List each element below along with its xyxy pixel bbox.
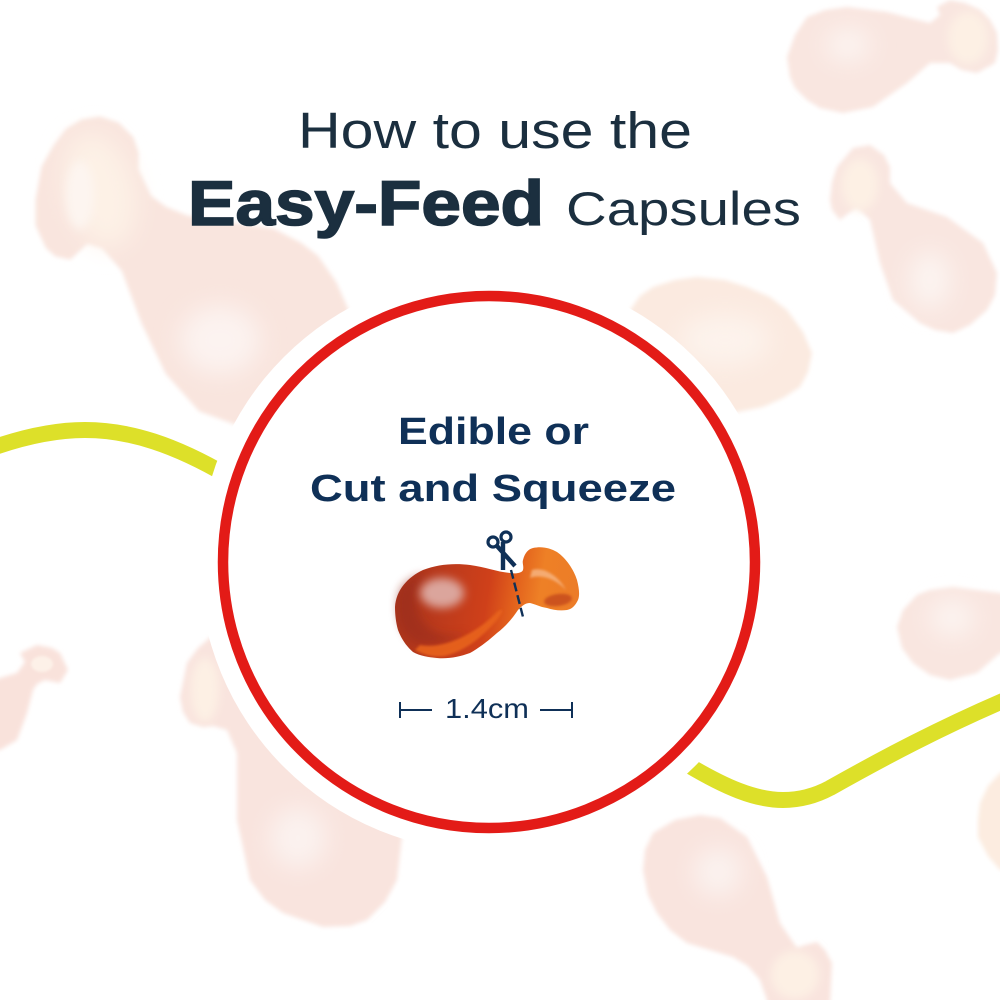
- capsule illustration: [395, 547, 579, 658]
- title: Easy-Feed Capsules: [188, 169, 801, 239]
- faded capsule: bottom right: [643, 815, 832, 1000]
- faded capsule: top right: [787, 0, 998, 113]
- subheading: Edible or Cut and Squeeze: Cut and Squeeze: [310, 468, 676, 510]
- icon: scissors with dashed cut line: [488, 532, 523, 617]
- faded capsule: far right edge: [978, 773, 1000, 870]
- faded capsule: right middle: [897, 587, 1000, 680]
- faded capsule: right: [830, 145, 997, 333]
- faded capsule: top left: [37, 118, 347, 423]
- subheading: Edible or Cut and Squeeze: [310, 411, 676, 510]
- title: How to use the: How to use the: [298, 102, 692, 159]
- faded capsule: bottom centre: [180, 635, 402, 927]
- title: Easy-Feed Capsules: Capsules: [566, 182, 801, 235]
- subheading: Edible or Cut and Squeeze: Edible or: [398, 411, 589, 453]
- faded capsule: behind circle, right: [630, 277, 812, 413]
- faded capsule: far left: [0, 645, 68, 750]
- title: Easy-Feed Capsules: Easy-Feed: [188, 169, 544, 239]
- yellow-green curve: right: [688, 700, 1000, 800]
- dimension label: 1.4cm: 1.4cm: [445, 693, 529, 724]
- yellow-green curve: left: [0, 430, 228, 476]
- dimension label: 1.4cm: [400, 693, 572, 724]
- white circle panel with red ring: [199, 272, 779, 852]
